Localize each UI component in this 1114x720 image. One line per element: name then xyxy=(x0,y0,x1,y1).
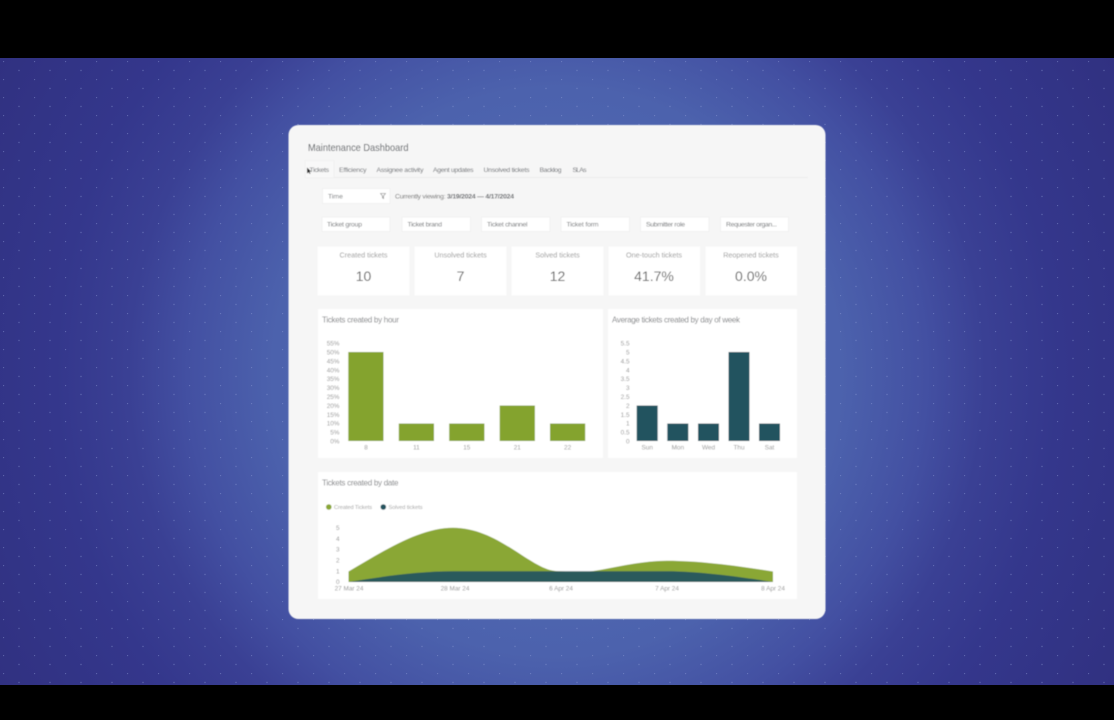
filter row: Ticket brand xyxy=(408,222,442,228)
x axis labels: 28 Mar 24 xyxy=(441,586,470,592)
x axis labels: 22 xyxy=(564,444,572,452)
x axis labels: Sun xyxy=(642,444,653,452)
x axis labels xyxy=(364,444,572,452)
y axis labels xyxy=(621,340,630,446)
x axis labels: 8 xyxy=(364,444,368,452)
filter row: Ticket group xyxy=(327,222,362,228)
tab bar xyxy=(305,160,808,178)
KPI: reopened tickets: Reopened tickets xyxy=(723,250,779,260)
filter row: Ticket form xyxy=(566,222,599,228)
tab bar: Efficiency xyxy=(339,167,367,174)
x axis labels: 27 Mar 24 xyxy=(335,586,364,592)
KPI: reopened tickets xyxy=(706,246,797,296)
icon: mouse cursor xyxy=(307,168,311,174)
y axis labels: 5 xyxy=(626,350,630,356)
y axis labels: 2 xyxy=(336,558,340,564)
y axis labels: 5.5 xyxy=(621,340,630,348)
tab bar: Unsolved tickets xyxy=(484,167,530,174)
y axis labels: 3 xyxy=(336,547,340,554)
tab bar: Tickets xyxy=(310,167,330,174)
dashboard panel xyxy=(288,125,826,619)
x axis labels: 21 xyxy=(514,444,521,452)
KPI: created tickets: Created tickets xyxy=(340,250,388,260)
y axis labels: 1 xyxy=(336,568,340,575)
y axis labels: 4 xyxy=(336,536,340,543)
x axis labels: 6 Apr 24 xyxy=(549,586,573,592)
time filter: Time xyxy=(328,194,343,200)
filter row: Submitter role xyxy=(646,222,685,228)
tab bar: Assignee activity xyxy=(376,167,424,174)
y axis labels: 20% xyxy=(327,403,340,410)
y axis labels: 0% xyxy=(330,438,340,446)
KPI: one-touch tickets: One-touch tickets xyxy=(626,250,682,260)
panel: average tickets by day of week: Average tickets created by day of week xyxy=(612,316,741,324)
y axis labels: 0 xyxy=(626,438,630,446)
tab bar: Agent updates xyxy=(433,167,474,174)
legend: Solved tickets xyxy=(388,505,423,511)
panel: tickets created by date xyxy=(318,472,797,599)
y axis labels: 1 xyxy=(626,421,630,428)
y axis labels: 35% xyxy=(327,376,340,383)
legend: Created Tickets xyxy=(334,505,372,511)
y axis labels: 45% xyxy=(327,358,340,365)
panel: tickets created by hour xyxy=(318,309,603,458)
filter row: Requester organ... xyxy=(726,222,777,228)
green bars xyxy=(348,352,585,441)
y axis labels: 2.5 xyxy=(621,394,630,401)
KPI: created tickets: 10 xyxy=(356,268,371,284)
KPI: one-touch tickets: 41.7% xyxy=(634,268,674,284)
bottom black bar xyxy=(0,685,1114,720)
tab bar: Backlog xyxy=(540,167,562,174)
legend xyxy=(326,504,423,511)
panel: tickets created by hour: Tickets created by hour xyxy=(322,316,399,324)
y axis labels: 3.5 xyxy=(621,376,630,383)
y axis labels: 2 xyxy=(626,403,630,410)
x axis labels: Wed xyxy=(702,444,715,452)
KPI: unsolved tickets: 7 xyxy=(457,268,465,284)
area: solved tickets xyxy=(348,571,773,582)
KPI: created tickets xyxy=(318,246,410,296)
y axis labels: 5 xyxy=(336,525,340,532)
x axis labels: 15 xyxy=(463,444,471,452)
y axis labels: 5% xyxy=(330,430,340,437)
x axis labels: 8 Apr 24 xyxy=(761,586,785,592)
y axis labels: 55% xyxy=(327,340,340,348)
time filter xyxy=(322,188,390,204)
y axis labels: 50% xyxy=(327,350,340,356)
y axis labels: 4 xyxy=(626,367,630,374)
panel: tickets created by date: Tickets created by date xyxy=(322,478,399,488)
tab bar: SLAs xyxy=(572,167,587,174)
KPI: reopened tickets: 0.0% xyxy=(735,268,767,284)
y axis labels: 0.5 xyxy=(621,430,630,437)
filter row xyxy=(322,217,788,232)
y axis labels xyxy=(327,340,340,446)
x axis labels: 11 xyxy=(413,444,420,452)
KPI: unsolved tickets xyxy=(414,246,506,296)
y axis labels: 3 xyxy=(626,385,630,392)
top black bar xyxy=(0,0,1114,58)
KPI: solved tickets xyxy=(512,246,604,296)
x axis labels: Sat xyxy=(765,444,775,452)
KPI: solved tickets: 12 xyxy=(550,268,565,284)
title: Maintenance Dashboard xyxy=(308,142,409,154)
x axis labels xyxy=(642,444,775,452)
x axis labels: Mon xyxy=(672,444,684,452)
y axis labels: 0 xyxy=(336,579,340,586)
panel: average tickets by day of week xyxy=(608,309,797,458)
y axis labels: 40% xyxy=(327,367,340,374)
area: created tickets xyxy=(348,528,773,582)
x axis labels: 7 Apr 24 xyxy=(655,586,679,592)
y axis labels: 4.5 xyxy=(621,358,630,365)
y axis labels: 25% xyxy=(327,394,340,401)
filter row: Ticket channel xyxy=(487,222,528,228)
KPI: one-touch tickets xyxy=(608,246,700,296)
y axis labels: 10% xyxy=(327,421,340,428)
currently viewing text: Currently viewing: 3/19/2024 — 4/17/2024 xyxy=(395,194,514,200)
y axis labels xyxy=(336,525,340,586)
y axis labels: 30% xyxy=(327,385,340,392)
KPI: unsolved tickets: Unsolved tickets xyxy=(434,250,487,260)
teal bars xyxy=(637,352,780,441)
KPI: solved tickets: Solved tickets xyxy=(535,250,580,260)
y axis labels: 15% xyxy=(327,412,340,419)
y axis labels: 1.5 xyxy=(621,412,630,419)
x axis labels: Thu xyxy=(733,444,745,452)
x axis labels xyxy=(335,586,785,592)
